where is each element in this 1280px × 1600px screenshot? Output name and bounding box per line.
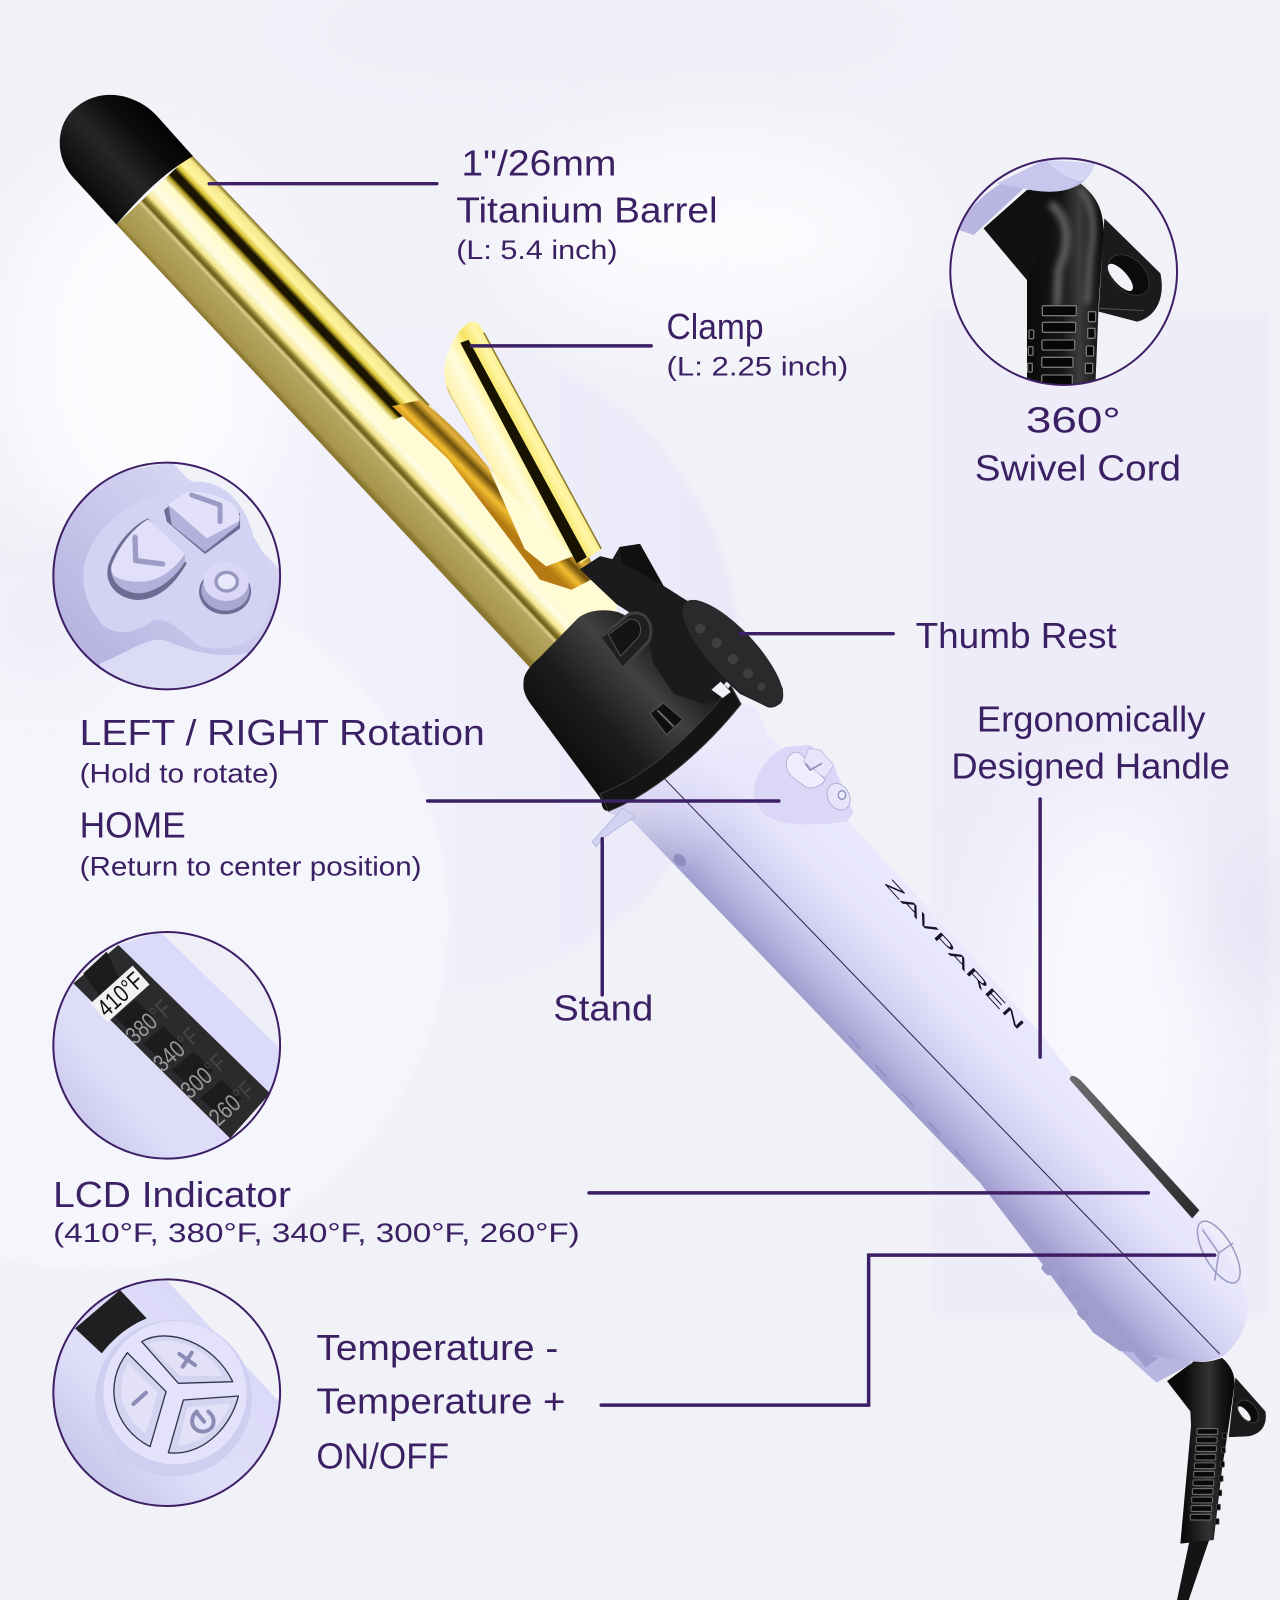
label: rotation controls: LEFT / RIGHT Rotation	[80, 713, 485, 753]
detail circle: temperature buttons	[50, 1277, 283, 1510]
detail circle: rotation buttons	[50, 460, 283, 697]
leader lines	[209, 184, 1215, 1405]
thumb rest lever	[580, 544, 797, 720]
control button outline	[1189, 1215, 1248, 1289]
handle body	[608, 704, 1248, 1362]
detail circle: LCD indicator	[50, 930, 283, 1167]
label: clamp: (L: 2.25 inch)	[667, 352, 848, 382]
barrel black tip	[60, 95, 193, 224]
label: rotation controls: HOME	[80, 806, 186, 846]
label: swivel cord: Swivel Cord	[975, 449, 1181, 489]
label: clamp: Clamp	[667, 307, 764, 347]
label: rotation controls: (Hold to rotate)	[80, 759, 279, 789]
titanium barrel	[116, 154, 618, 682]
clamp arm	[392, 400, 597, 590]
power cord and swivel plug	[1167, 1358, 1266, 1600]
LCD slot	[1070, 1076, 1199, 1218]
stand	[592, 808, 635, 847]
label: LCD indicator	[53, 1175, 580, 1248]
label: clamp	[667, 307, 848, 382]
label: LCD indicator: (410°F, 380°F, 340°F, 300°F, 260°F)	[53, 1218, 580, 1248]
label: temperature buttons	[316, 1328, 565, 1476]
collar	[523, 610, 741, 811]
label: temperature buttons: ON/OFF	[316, 1436, 449, 1476]
label: ergonomic handle: Ergonomically	[977, 700, 1206, 740]
label: temperature buttons: Temperature -	[316, 1328, 558, 1368]
label: barrel: (L: 5.4 inch)	[456, 235, 618, 265]
detail circle: LCD indicator: 380°F	[121, 995, 178, 1050]
detail circle: LCD indicator: 260°F	[204, 1077, 261, 1132]
detail circle: LCD indicator: 340°F	[148, 1023, 205, 1078]
label: thumb rest: Thumb Rest	[916, 616, 1117, 656]
label: temperature buttons: Temperature +	[316, 1381, 565, 1421]
label: ergonomic handle: Designed Handle	[951, 747, 1230, 787]
detail circle: LCD indicator: 300°F	[176, 1049, 233, 1104]
label: LCD indicator: LCD Indicator	[53, 1175, 291, 1215]
detail circle: swivel cord	[947, 157, 1180, 390]
label: barrel: 1"/26mm	[461, 144, 617, 184]
label: barrel	[456, 144, 718, 265]
brand logo: ZAVPAREN	[882, 876, 1028, 1033]
label: ergonomic handle	[951, 700, 1230, 787]
label: rotation controls	[80, 713, 485, 882]
detail circle: LCD indicator: 410°F	[92, 967, 149, 1022]
label: rotation controls: (Return to center position)	[80, 852, 422, 882]
clamp plate	[444, 321, 601, 563]
handle vent base	[1107, 1339, 1192, 1383]
label: swivel cord: 360°	[1026, 401, 1121, 441]
label: swivel cord	[975, 401, 1181, 489]
label: stand: Stand	[553, 988, 653, 1028]
rotation buttons on handle	[754, 745, 855, 825]
label: barrel: Titanium Barrel	[456, 190, 718, 230]
